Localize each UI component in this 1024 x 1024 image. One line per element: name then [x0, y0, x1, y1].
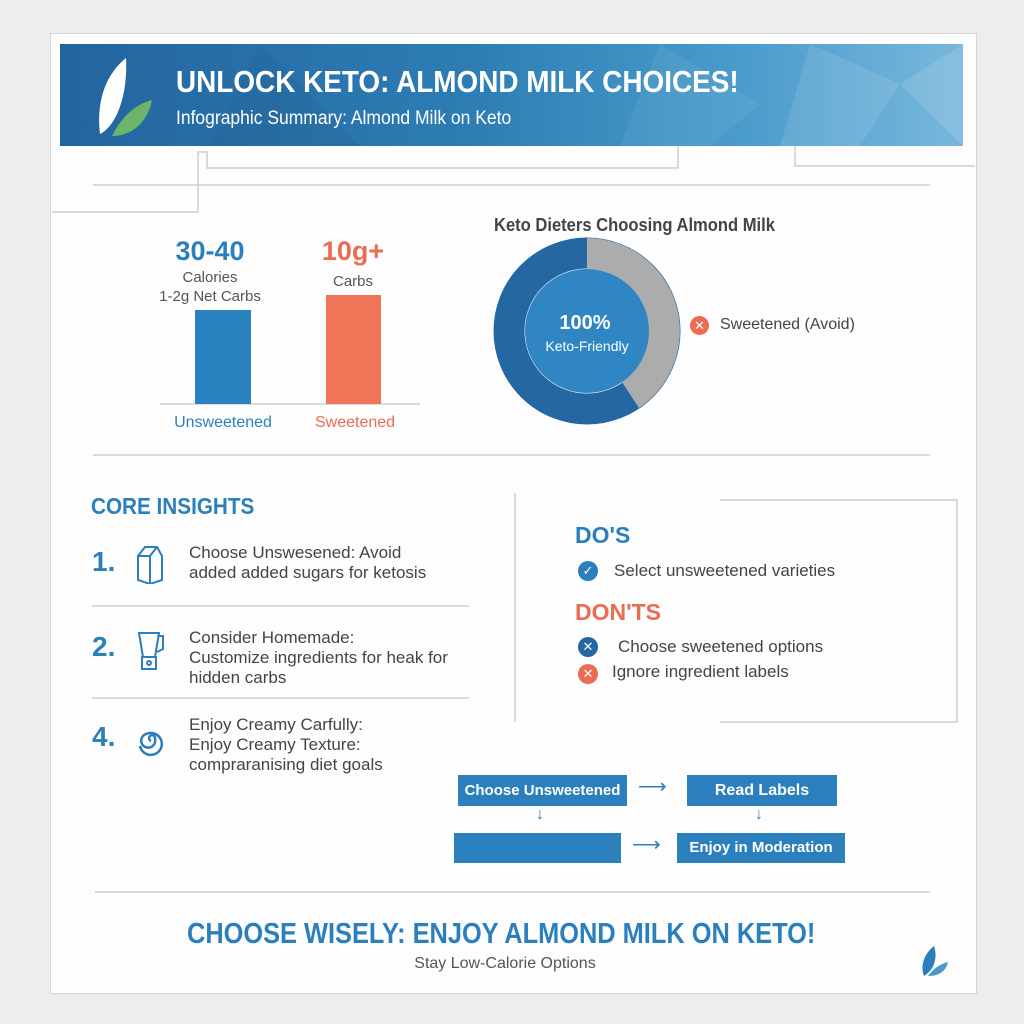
- do's and don'ts panel: ✕: [583, 639, 593, 654]
- donut chart: ✕: [694, 318, 705, 333]
- do's and don'ts panel: Select unsweetened varieties: [614, 561, 835, 580]
- donut chart: Sweetened (Avoid): [720, 316, 855, 333]
- flowchart: Enjoy in Moderation: [689, 839, 833, 856]
- title: UNLOCK KETO: ALMOND MILK CHOICES!: [176, 64, 739, 99]
- flowchart: ⟶: [632, 834, 661, 856]
- footer subtitle: Stay Low-Calorie Options: [414, 955, 596, 972]
- bar chart: Calories: [182, 269, 238, 286]
- flowchart: ↓: [536, 806, 544, 823]
- flowchart: ↓: [755, 806, 763, 823]
- insight 1: added added sugars for ketosis: [189, 563, 426, 582]
- donut chart: Keto-Friendly: [545, 338, 629, 354]
- flowchart: Choose Unsweetened: [465, 782, 620, 799]
- do's and don'ts panel: DO'S: [575, 522, 630, 548]
- bar chart: Sweetened: [315, 414, 395, 431]
- do's and don'ts panel: ✕: [583, 666, 593, 681]
- bar chart: Carbs: [333, 273, 373, 290]
- insight 4: compraranising diet goals: [189, 755, 383, 774]
- insight 2: Consider Homemade:: [189, 628, 354, 647]
- footer heading: CHOOSE WISELY: ENJOY ALMOND MILK ON KETO!: [187, 918, 815, 950]
- flowchart: [454, 775, 845, 863]
- do's and don'ts panel: [575, 522, 835, 684]
- bar chart: 10g+: [322, 236, 384, 266]
- bar chart: 1-2g Net Carbs: [159, 288, 261, 305]
- donut chart: 100%: [559, 312, 611, 334]
- do's and don'ts panel: Choose sweetened options: [618, 637, 823, 656]
- insight 1: 1.: [92, 546, 115, 577]
- icon: almond logo: [99, 58, 152, 136]
- insight 2: hidden carbs: [189, 668, 286, 687]
- insight 4: Enjoy Creamy Carfully:: [189, 715, 363, 734]
- insight 4: [92, 715, 383, 774]
- flowchart: ⟶: [638, 776, 667, 798]
- insight 2: [92, 628, 448, 687]
- insight 4: 4.: [92, 721, 115, 752]
- insight 1: Choose Unswesened: Avoid: [189, 543, 401, 562]
- flowchart: Read Labels: [715, 782, 809, 799]
- subtitle: Infographic Summary: Almond Milk on Keto: [176, 108, 511, 129]
- donut chart: [494, 215, 855, 424]
- do's and don'ts panel: DON'TS: [575, 599, 661, 625]
- icon: footer leaf: [922, 946, 948, 976]
- insight 4: Enjoy Creamy Texture:: [189, 735, 361, 754]
- donut chart: Keto Dieters Choosing Almond Milk: [494, 215, 775, 235]
- insight 2: Customize ingredients for heak for: [189, 648, 448, 667]
- insight 1: [92, 543, 426, 584]
- heading: core insights: CORE INSIGHTS: [91, 493, 254, 519]
- bar chart: Unsweetened: [174, 414, 272, 431]
- do's and don'ts panel: Ignore ingredient labels: [612, 662, 789, 681]
- header banner: [60, 44, 963, 146]
- do's and don'ts panel: ✓: [583, 563, 593, 578]
- insight 2: 2.: [92, 631, 115, 662]
- bar chart: [159, 236, 395, 431]
- bar chart: 30-40: [175, 236, 245, 266]
